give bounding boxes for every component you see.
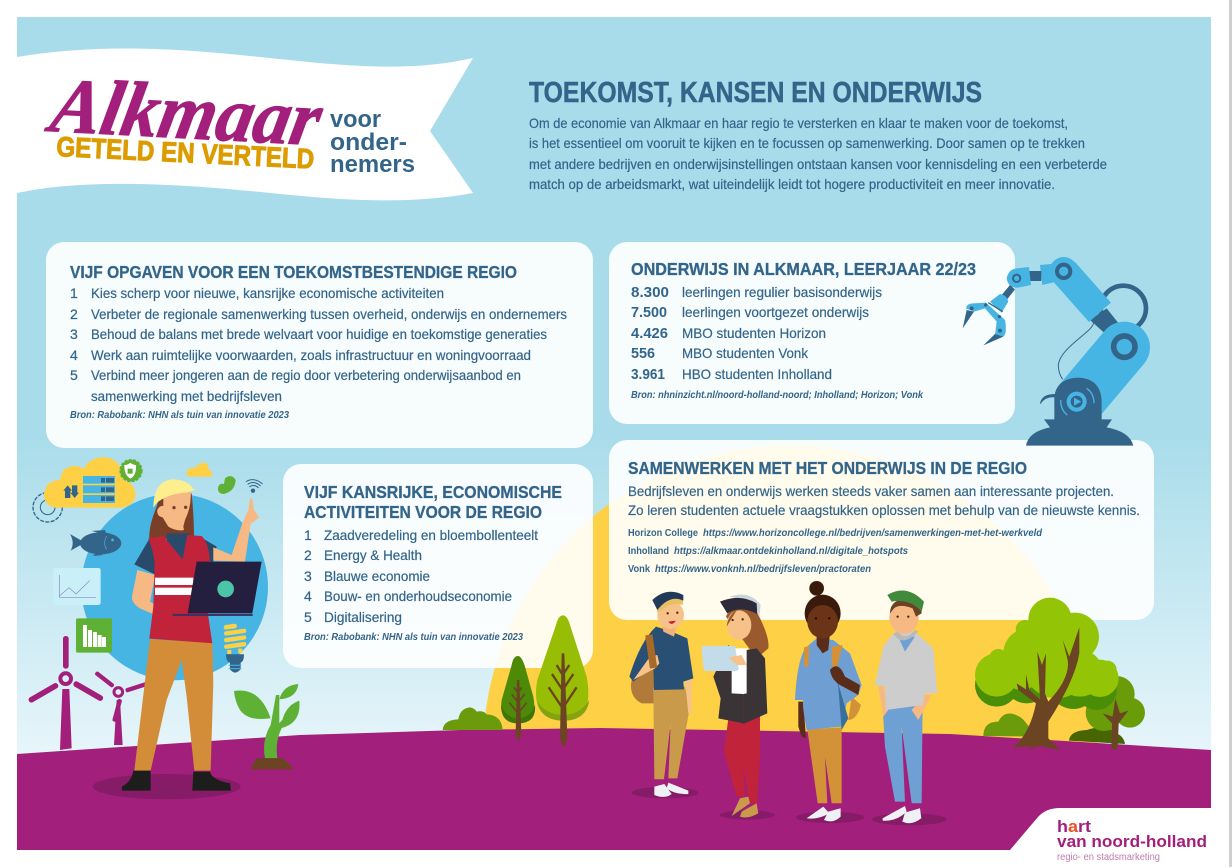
table: leerlingenaantallen [631, 284, 882, 383]
table: leerlingenaantallen: HBO studenten Inholland [682, 366, 832, 382]
icon: bar chart [76, 618, 112, 653]
icon: wifi [246, 480, 263, 492]
logo: voor ondernemers: voor [330, 106, 381, 133]
woman figure [122, 479, 262, 791]
intro text: Om de economie van Alkmaar en haar regio te versterken en klaar te maken voor de toekomst, [529, 115, 1068, 131]
list: opgaven: Behoud de balans met brede welvaart voor huidige en toekomstige generaties [91, 326, 547, 342]
title: TOEKOMST, KANSEN EN ONDERWIJS [529, 77, 982, 109]
icon: line chart [53, 568, 101, 605]
logo: voor ondernemers [330, 106, 415, 178]
intro text: is het essentieel om vooruit te kijken en te focussen op samenwerking. Door samen op te trekken [529, 135, 1085, 151]
small tree [1086, 676, 1145, 749]
illustration: trees left [443, 615, 589, 747]
heading: kansrijke activiteiten: ACTIVITEITEN VOOR DE REGIO [304, 502, 542, 522]
illustration: students [629, 581, 947, 825]
icon: light bulb [223, 623, 247, 673]
list: opgaven: 5 [70, 367, 78, 383]
list: opgaven: 2 [70, 306, 78, 322]
list: opgaven: Kies scherp voor nieuwe, kansrijke economische activiteiten [91, 285, 444, 301]
list: activiteiten: Energy & Health [324, 547, 422, 563]
table: leerlingenaantallen: 8.300 [631, 285, 669, 301]
logo: geteld en verteld: GETELD EN VERTELD [56, 131, 315, 175]
links: Horizon College [628, 528, 698, 539]
table: leerlingenaantallen: 4.426 [631, 326, 668, 342]
icon: cloud server [44, 457, 136, 508]
panel: samenwerken [609, 440, 1154, 620]
list: opgaven: Werk aan ruimtelijke voorwaarden, zoals infrastructuur en woningvoorraad [91, 347, 531, 363]
table: leerlingenaantallen: leerlingen voortgezet onderwijs [682, 304, 869, 320]
purple ground [17, 728, 1211, 850]
intro text [529, 115, 1107, 192]
list: opgaven: Verbind meer jongeren aan de regio door verbetering onderwijsaanbod en [91, 367, 521, 383]
dark tree [501, 656, 535, 740]
student 1 [629, 592, 698, 798]
heading: onderwijs: ONDERWIJS IN ALKMAAR, LEERJAAR 22/23 [631, 259, 976, 279]
logo: Alkmaar: Alkmaar [40, 62, 330, 162]
logo: hart van noord-holland: hart [1057, 817, 1091, 836]
icon: bean [218, 476, 236, 494]
list: opgaven: 1 [70, 285, 78, 301]
links [628, 528, 1043, 575]
heading: samenwerken: SAMENWERKEN MET HET ONDERWIJS IN DE REGIO [628, 458, 1027, 478]
bush [443, 707, 503, 730]
icon: fish [70, 530, 121, 556]
blue circle [81, 494, 268, 680]
list: activiteiten: Blauwe economie [324, 568, 430, 584]
student 3 [795, 581, 864, 823]
illustration: woman with laptop [28, 457, 300, 799]
body text [628, 483, 1140, 518]
links: Inholland [628, 546, 669, 557]
bushes [983, 714, 1037, 737]
light tree [536, 615, 589, 747]
icon: gear [33, 493, 62, 522]
links: https://alkmaar.ontdekinholland.nl/digitale_hotspots [674, 546, 908, 557]
heading: kansrijke activiteiten [304, 482, 562, 522]
icon: wind turbines [28, 636, 148, 750]
banner flag [17, 48, 473, 200]
body text: Bedrijfsleven en onderwijs werken steeds vaker samen aan interessante projecten. [628, 483, 1114, 499]
source: Bron: Rabobank: NHN als tuin van innovatie 2023 [70, 410, 289, 421]
body text: Zo leren studenten actuele vraagstukken oplossen met behulp van de nieuwste kennis. [628, 502, 1140, 518]
source: Bron: Rabobank: NHN als tuin van innovatie 2023 [304, 632, 523, 643]
table: leerlingenaantallen: 556 [631, 346, 655, 362]
table: leerlingenaantallen: leerlingen regulier basisonderwijs [682, 284, 882, 300]
panel: vijf opgaven [46, 242, 593, 448]
intro text: met andere bedrijven en onderwijsinstellingen ontstaan kansen voor kennisdeling en een verbeterde [529, 156, 1107, 172]
table: leerlingenaantallen: MBO studenten Vonk [682, 345, 809, 361]
icon: small cloud [186, 463, 212, 477]
shadow under woman [93, 774, 241, 799]
illustration: robot arm [963, 257, 1146, 446]
list: activiteiten [304, 527, 538, 625]
icon: security shield [120, 460, 142, 481]
list: opgaven: Verbeter de regionale samenwerking tussen overheid, onderwijs en ondernemers [91, 306, 567, 322]
panel: vijf kansrijke activiteiten [283, 464, 593, 668]
logo: hart van noord-holland: regio- en stadsmarketing [1057, 852, 1160, 863]
list: activiteiten: Bouw- en onderhoudseconomie [324, 588, 512, 604]
list: opgaven [70, 285, 567, 404]
table: leerlingenaantallen: 3.961 [631, 367, 665, 383]
links: https://www.horizoncollege.nl/bedrijven/samenwerkingen-met-het-werkveld [703, 528, 1043, 539]
list: activiteiten: 1 [304, 527, 312, 543]
logo: hart van noord-holland: van noord-holland [1057, 832, 1207, 851]
student 2 [702, 595, 775, 820]
table: leerlingenaantallen: 7.500 [631, 305, 667, 321]
logo: voor ondernemers: nemers [330, 151, 415, 178]
links: https://www.vonknh.nl/bedrijfsleven/practoraten [655, 564, 871, 575]
list: activiteiten: Zaadveredeling en bloembollenteelt [324, 527, 538, 543]
list: activiteiten: 5 [304, 609, 312, 625]
list: activiteiten: Digitalisering [324, 609, 402, 625]
list: activiteiten: 4 [304, 588, 312, 604]
heading: kansrijke activiteiten: VIJF KANSRIJKE, ECONOMISCHE [304, 482, 562, 502]
illustration: trees right [975, 598, 1145, 750]
logo: voor ondernemers: onder- [330, 129, 407, 156]
list: activiteiten: 2 [304, 547, 312, 563]
logo: hart van noord-holland [1010, 808, 1211, 863]
large tree [975, 598, 1119, 750]
list: opgaven: samenwerking met bedrijfsleven [91, 388, 282, 404]
list: activiteiten: 3 [304, 568, 312, 584]
source: Bron: nhninzicht.nl/noord-holland-noord; Inholland; Horizon; Vonk [631, 390, 923, 401]
table: leerlingenaantallen: MBO studenten Horizon [682, 325, 826, 341]
student 4 [872, 590, 947, 825]
heading: vijf opgaven: VIJF OPGAVEN VOOR EEN TOEKOMSTBESTENDIGE REGIO [70, 262, 517, 282]
yellow sun [483, 445, 1097, 752]
intro text: match op de arbeidsmarkt, wat uiteindelijk leidt tot hogere productiviteit en meer innovatie. [529, 176, 1055, 192]
list: opgaven: 3 [70, 326, 78, 342]
panel: onderwijs in Alkmaar [609, 242, 1015, 424]
icon: plant [234, 684, 300, 769]
links: Vonk [628, 564, 650, 575]
list: opgaven: 4 [70, 347, 78, 363]
